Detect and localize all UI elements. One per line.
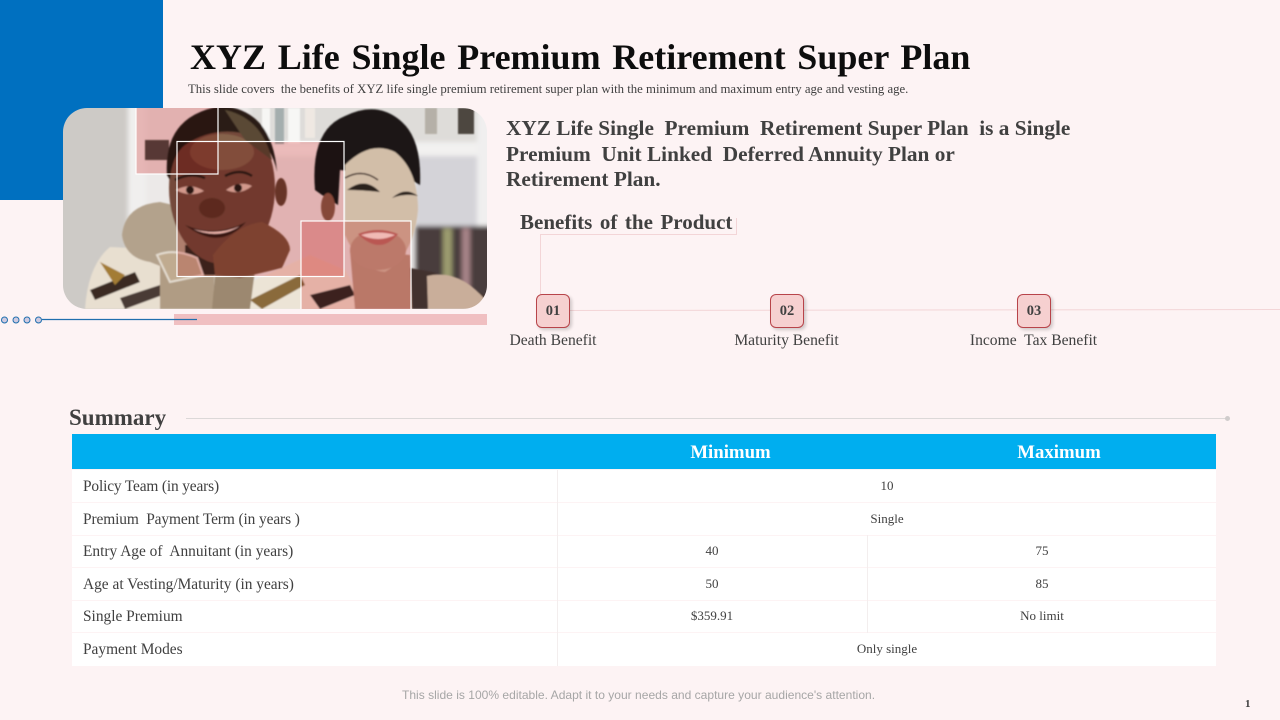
woman's shoulder and dress	[405, 268, 487, 309]
row: single premium: $359.91	[691, 608, 733, 623]
man's fist	[213, 222, 290, 278]
title: XYZ Life Single Premium Retirement Super Plan	[190, 37, 970, 77]
man's head	[168, 130, 276, 264]
footer note: This slide is 100% editable. Adapt it to your needs and capture your audience's attention.	[402, 688, 875, 702]
books top	[262, 108, 270, 140]
row: vesting age: 85	[1036, 576, 1048, 590]
row: payment modes	[72, 633, 1216, 666]
intro paragraph	[506, 116, 1070, 191]
blue corner block	[0, 0, 163, 200]
man's neck	[184, 244, 216, 276]
row: premium payment term: Single	[870, 510, 904, 526]
row: policy term: Policy Team (in years)	[83, 478, 219, 494]
woman hair	[314, 109, 420, 205]
summary rule	[186, 418, 1227, 419]
row: vesting age: 50	[706, 576, 718, 590]
benefits connector lines	[540, 218, 1280, 311]
pink overlay squares	[136, 108, 218, 174]
row: entry age: 75	[1036, 543, 1048, 558]
benefit 03 label: Income Tax Benefit	[970, 332, 1097, 349]
benefit 03	[1017, 294, 1051, 328]
arm around	[122, 201, 187, 266]
benefit 01 label: Death Benefit	[509, 332, 597, 349]
benefit 01: 01	[546, 303, 560, 319]
dotted line decoration	[1, 316, 197, 324]
row: policy term	[72, 470, 1216, 502]
intro paragraph: XYZ Life Single Premium Retirement Super Plan is a Single	[506, 116, 1070, 140]
dark shelf item	[145, 140, 169, 160]
benefit 02: 02	[780, 303, 794, 319]
benefit 02	[770, 294, 804, 328]
row: vesting age	[72, 568, 1216, 600]
table header: Maximum	[1017, 442, 1101, 463]
summary heading: Summary	[69, 405, 166, 430]
benefit 01	[536, 294, 570, 328]
row: entry age: 40	[706, 543, 718, 558]
woman face	[345, 148, 418, 272]
intro paragraph: Premium Unit Linked Deferred Annuity Plan or	[506, 142, 955, 166]
row: vesting age: Age at Vesting/Maturity (in years)	[83, 576, 294, 592]
row: single premium	[72, 600, 1216, 632]
summary rule end dot	[1225, 416, 1230, 421]
summary table	[72, 434, 1216, 666]
table header: Minimum	[690, 442, 771, 463]
woman eyes and mouth	[347, 183, 380, 192]
man's shirt	[85, 247, 213, 309]
row: payment modes: Payment Modes	[83, 640, 183, 658]
benefit 03: 03	[1027, 303, 1041, 319]
page number: 1	[1245, 698, 1250, 710]
row: single premium: Single Premium	[83, 608, 183, 625]
row: payment modes: Only single	[857, 640, 917, 656]
intro paragraph: Retirement Plan.	[506, 167, 661, 191]
subtitle: This slide covers the benefits of XYZ life single premium retirement super plan with the minimum and maximum entry age and vesting age.	[188, 82, 908, 96]
row: premium payment term	[72, 503, 1216, 534]
benefit 02 label: Maturity Benefit	[734, 332, 839, 349]
photo: smiling couple with overlay squares	[63, 108, 487, 309]
row: policy term: 10	[880, 478, 894, 492]
row: premium payment term: Premium Payment Term (in years )	[83, 510, 300, 528]
man's eyes and smile	[176, 186, 204, 194]
table header	[72, 434, 1216, 469]
benefits heading: Benefits of the Product	[520, 210, 732, 234]
row: entry age	[72, 536, 1216, 567]
woman neck and chest	[350, 250, 412, 309]
pink bar under photo	[174, 314, 487, 325]
row: entry age: Entry Age of Annuitant (in years)	[83, 543, 293, 560]
row: single premium: No limit	[1020, 608, 1064, 623]
